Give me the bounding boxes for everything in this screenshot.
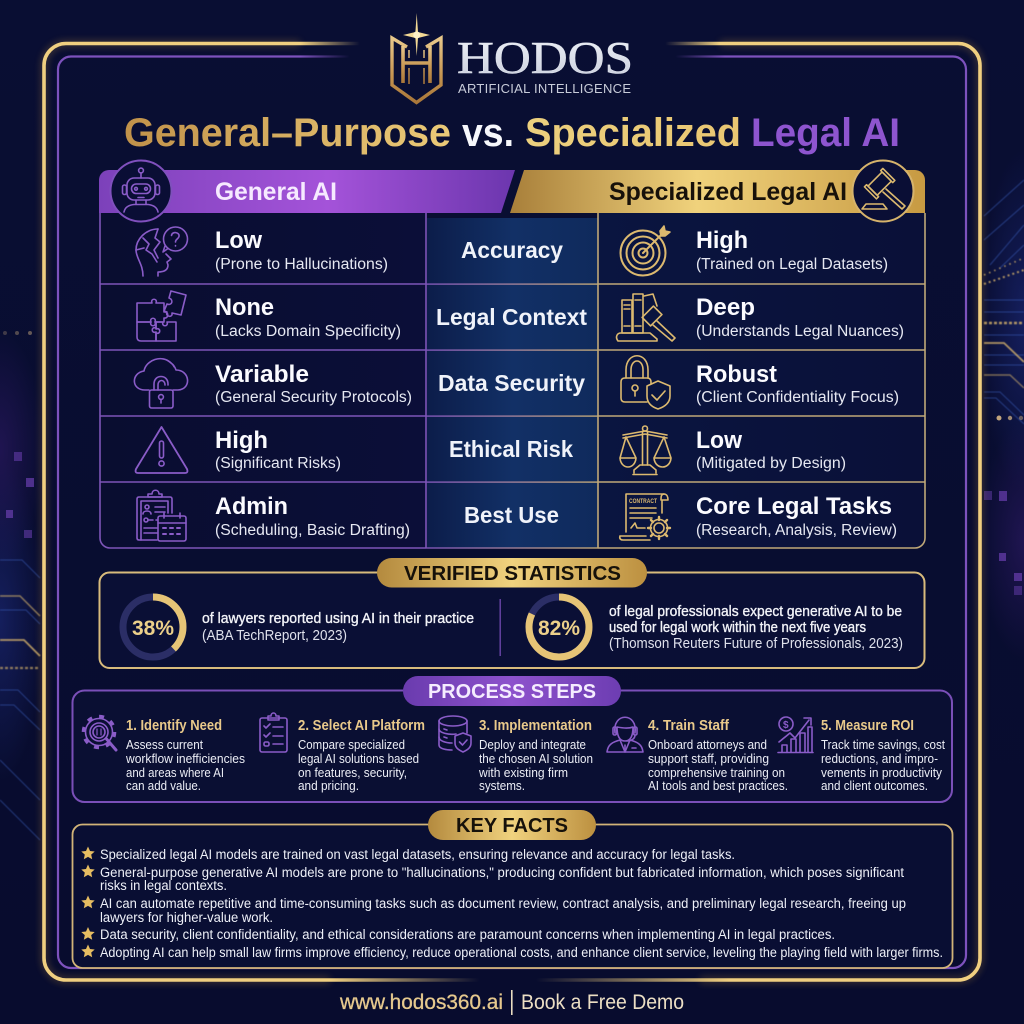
panel: key facts bbox=[72, 810, 952, 968]
step body: comprehensive training on bbox=[648, 766, 785, 780]
step body: on features, security, bbox=[298, 766, 407, 780]
icon: cloud with padlock bbox=[134, 359, 188, 408]
wordmark: HODOS bbox=[457, 32, 633, 83]
left value: Variable bbox=[215, 361, 309, 388]
fact 3: AI can automate repetitive and time-consuming tasks such as document review, contract analysis, and preliminary legal research, freeing up bbox=[100, 896, 906, 911]
step body: workflow inefficiencies bbox=[125, 752, 245, 766]
icon: checklist clipboard bbox=[260, 713, 287, 752]
donut: 38 percent bbox=[123, 597, 183, 657]
step 5: measure ROI bbox=[778, 717, 945, 793]
panel: verified statistics bbox=[100, 558, 924, 668]
criterion: Best Use bbox=[464, 502, 559, 528]
step body: Track time savings, cost bbox=[821, 738, 945, 752]
left note: (Significant Risks) bbox=[215, 455, 341, 472]
step title: 4. Train Staff bbox=[648, 718, 729, 734]
step title: 1. Identify Need bbox=[126, 718, 222, 734]
logo: HODOS Artificial Intelligence bbox=[392, 13, 633, 102]
step title: 3. Implementation bbox=[479, 718, 592, 734]
icon: database with shield bbox=[439, 716, 471, 752]
row: Legal Context bbox=[137, 291, 904, 341]
left value: Admin bbox=[215, 493, 288, 520]
title: Specialized bbox=[525, 111, 741, 155]
step body: legal AI solutions based bbox=[298, 752, 419, 766]
icon: padlock and shield bbox=[621, 356, 670, 409]
left note: (Scheduling, Basic Drafting) bbox=[215, 522, 410, 539]
step 1: identify need bbox=[84, 716, 245, 793]
right note: (Trained on Legal Datasets) bbox=[696, 256, 888, 273]
criterion: Data Security bbox=[438, 370, 585, 396]
heading pill: key facts bbox=[428, 810, 596, 840]
criterion: Ethical Risk bbox=[449, 436, 574, 462]
icon: puzzle pieces bbox=[137, 291, 186, 341]
icon: cracked head with question bbox=[136, 227, 188, 276]
criterion: Legal Context bbox=[436, 304, 587, 330]
icon: coin and growth chart: $ bbox=[783, 720, 789, 731]
right note: (Client Confidentiality Focus) bbox=[696, 389, 899, 406]
icon: target with arrow bbox=[620, 226, 670, 276]
header: General AI bbox=[99, 170, 515, 213]
step body: with existing firm bbox=[478, 766, 568, 780]
fact 1: Specialized legal AI models are trained on vast legal datasets, ensuring relevance and accuracy for legal tasks. bbox=[100, 847, 735, 862]
panel: process steps bbox=[72, 676, 952, 802]
step body: Deploy and integrate bbox=[479, 738, 586, 752]
fact 2: General-purpose generative AI models are prone to "hallucinations," producing confident but fabricated information, which poses significant bbox=[100, 865, 904, 880]
stat text: legal professionals expectation: used for legal work within the next five years bbox=[609, 620, 866, 636]
row: Ethical Risk bbox=[136, 426, 846, 474]
right value: Robust bbox=[696, 361, 777, 388]
criterion: Accuracy bbox=[461, 237, 563, 263]
icon: books and gavel bbox=[617, 294, 675, 341]
step body: support staff, providing bbox=[648, 752, 769, 766]
step title: 2. Select AI Platform bbox=[298, 718, 425, 734]
donut: 82 percent: 82% bbox=[538, 616, 580, 640]
heading pill: process steps: PROCESS STEPS bbox=[428, 681, 596, 703]
step body: the chosen AI solution bbox=[479, 752, 593, 766]
icon: gavel badge bbox=[852, 160, 914, 222]
fact 3: lawyers for higher-value work. bbox=[100, 910, 273, 925]
tagline: ARTIFICIAL INTELLIGENCE bbox=[458, 81, 631, 96]
fact 5: Adopting AI can help small law firms improve efficiency, reduce operational costs, and enhance client service, leveling the playing field with larger firms. bbox=[100, 945, 943, 960]
row: Data Security bbox=[134, 356, 899, 409]
title bbox=[124, 111, 900, 155]
title: General–Purpose bbox=[124, 111, 451, 155]
row: Best Use bbox=[137, 490, 897, 541]
footer: Book a Free Demo bbox=[521, 991, 684, 1014]
comparison table bbox=[99, 160, 925, 549]
header: Specialized Legal AI bbox=[510, 170, 925, 213]
stat text: lawyers using AI: of lawyers reported using AI in their practice bbox=[202, 611, 474, 627]
icon: contract and gear: CONTRACT bbox=[629, 499, 657, 505]
donut: 38 percent: 38% bbox=[132, 616, 174, 640]
step 4: train staff bbox=[607, 717, 788, 793]
right value: High bbox=[696, 227, 748, 254]
footer bbox=[339, 990, 684, 1015]
left value: None bbox=[215, 294, 274, 321]
step body: Compare specialized bbox=[298, 738, 405, 752]
right value: Low bbox=[696, 427, 743, 454]
icon: scales of justice bbox=[620, 426, 671, 474]
icon: contract and gear bbox=[620, 494, 670, 540]
row: Accuracy bbox=[136, 226, 888, 276]
stat text: lawyers using AI: (ABA TechReport, 2023) bbox=[202, 628, 347, 644]
heading pill: verified statistics: VERIFIED STATISTICS bbox=[404, 563, 621, 585]
heading pill: verified statistics bbox=[377, 558, 647, 588]
fact 3 bbox=[81, 896, 906, 925]
step body: can add value. bbox=[126, 779, 201, 793]
fact 4: Data security, client confidentiality, and ethical considerations are paramount concerns when implementing AI in legal practices. bbox=[100, 927, 835, 942]
fact 2: risks in legal contexts. bbox=[100, 878, 227, 893]
header: General AI: General AI bbox=[215, 178, 337, 206]
step body bbox=[478, 738, 593, 793]
step 2: select AI platform bbox=[260, 713, 425, 793]
step body: AI tools and best practices. bbox=[648, 779, 788, 793]
step body: and client outcomes. bbox=[821, 779, 928, 793]
left value: High bbox=[215, 427, 268, 454]
step body: and pricing. bbox=[298, 779, 359, 793]
footer: www.hodos360.ai bbox=[339, 991, 503, 1014]
icon: robot badge bbox=[110, 160, 172, 222]
stat text: legal professionals expectation: (Thomson Reuters Future of Professionals, 2023) bbox=[609, 636, 903, 652]
stat text: lawyers using AI bbox=[202, 611, 474, 644]
circuit texture: left and right edges bbox=[0, 150, 1024, 840]
step body: systems. bbox=[479, 779, 525, 793]
step body bbox=[821, 738, 945, 793]
left note: (Prone to Hallucinations) bbox=[215, 256, 388, 273]
left value: Low bbox=[215, 227, 263, 254]
icon: coin and growth chart bbox=[778, 717, 813, 752]
inner purple frame bbox=[58, 56, 966, 968]
step body: reductions, and impro- bbox=[821, 752, 938, 766]
left note: (General Security Protocols) bbox=[215, 389, 412, 406]
donut: 82 percent bbox=[529, 597, 589, 657]
heading pill: process steps bbox=[403, 676, 621, 706]
step body bbox=[648, 738, 788, 793]
title: Legal AI bbox=[751, 111, 900, 155]
title: vs. bbox=[462, 111, 514, 155]
icon: gear with magnifier bbox=[84, 716, 116, 750]
icon: person with headset bbox=[607, 717, 643, 752]
step body: Onboard attorneys and bbox=[648, 738, 767, 752]
stat text: legal professionals expectation: of legal professionals expect generative AI to be bbox=[609, 604, 902, 620]
step body: Assess current bbox=[126, 738, 203, 752]
heading pill: key facts: KEY FACTS bbox=[456, 815, 568, 837]
step body: and areas where AI bbox=[126, 766, 224, 780]
step body bbox=[298, 738, 419, 793]
step body: vements in productivity bbox=[821, 766, 943, 780]
step 3: implementation bbox=[439, 716, 593, 793]
left note: (Lacks Domain Specificity) bbox=[215, 323, 401, 340]
step body bbox=[125, 738, 245, 793]
icon: shield monogram with star bbox=[392, 13, 441, 102]
right value: Core Legal Tasks bbox=[696, 493, 892, 520]
right value: Deep bbox=[696, 294, 755, 321]
table body backgrounds bbox=[100, 213, 925, 548]
step title: 5. Measure ROI bbox=[821, 718, 914, 734]
stat text: legal professionals expectation bbox=[609, 604, 903, 652]
icon: warning triangle bbox=[136, 427, 187, 473]
header: Specialized Legal AI: Specialized Legal AI bbox=[609, 178, 847, 206]
right note: (Understands Legal Nuances) bbox=[696, 323, 904, 340]
icon: clipboard and calendar bbox=[137, 490, 186, 541]
fact 2 bbox=[81, 864, 904, 893]
right note: (Mitigated by Design) bbox=[696, 455, 846, 472]
right note: (Research, Analysis, Review) bbox=[696, 522, 897, 539]
